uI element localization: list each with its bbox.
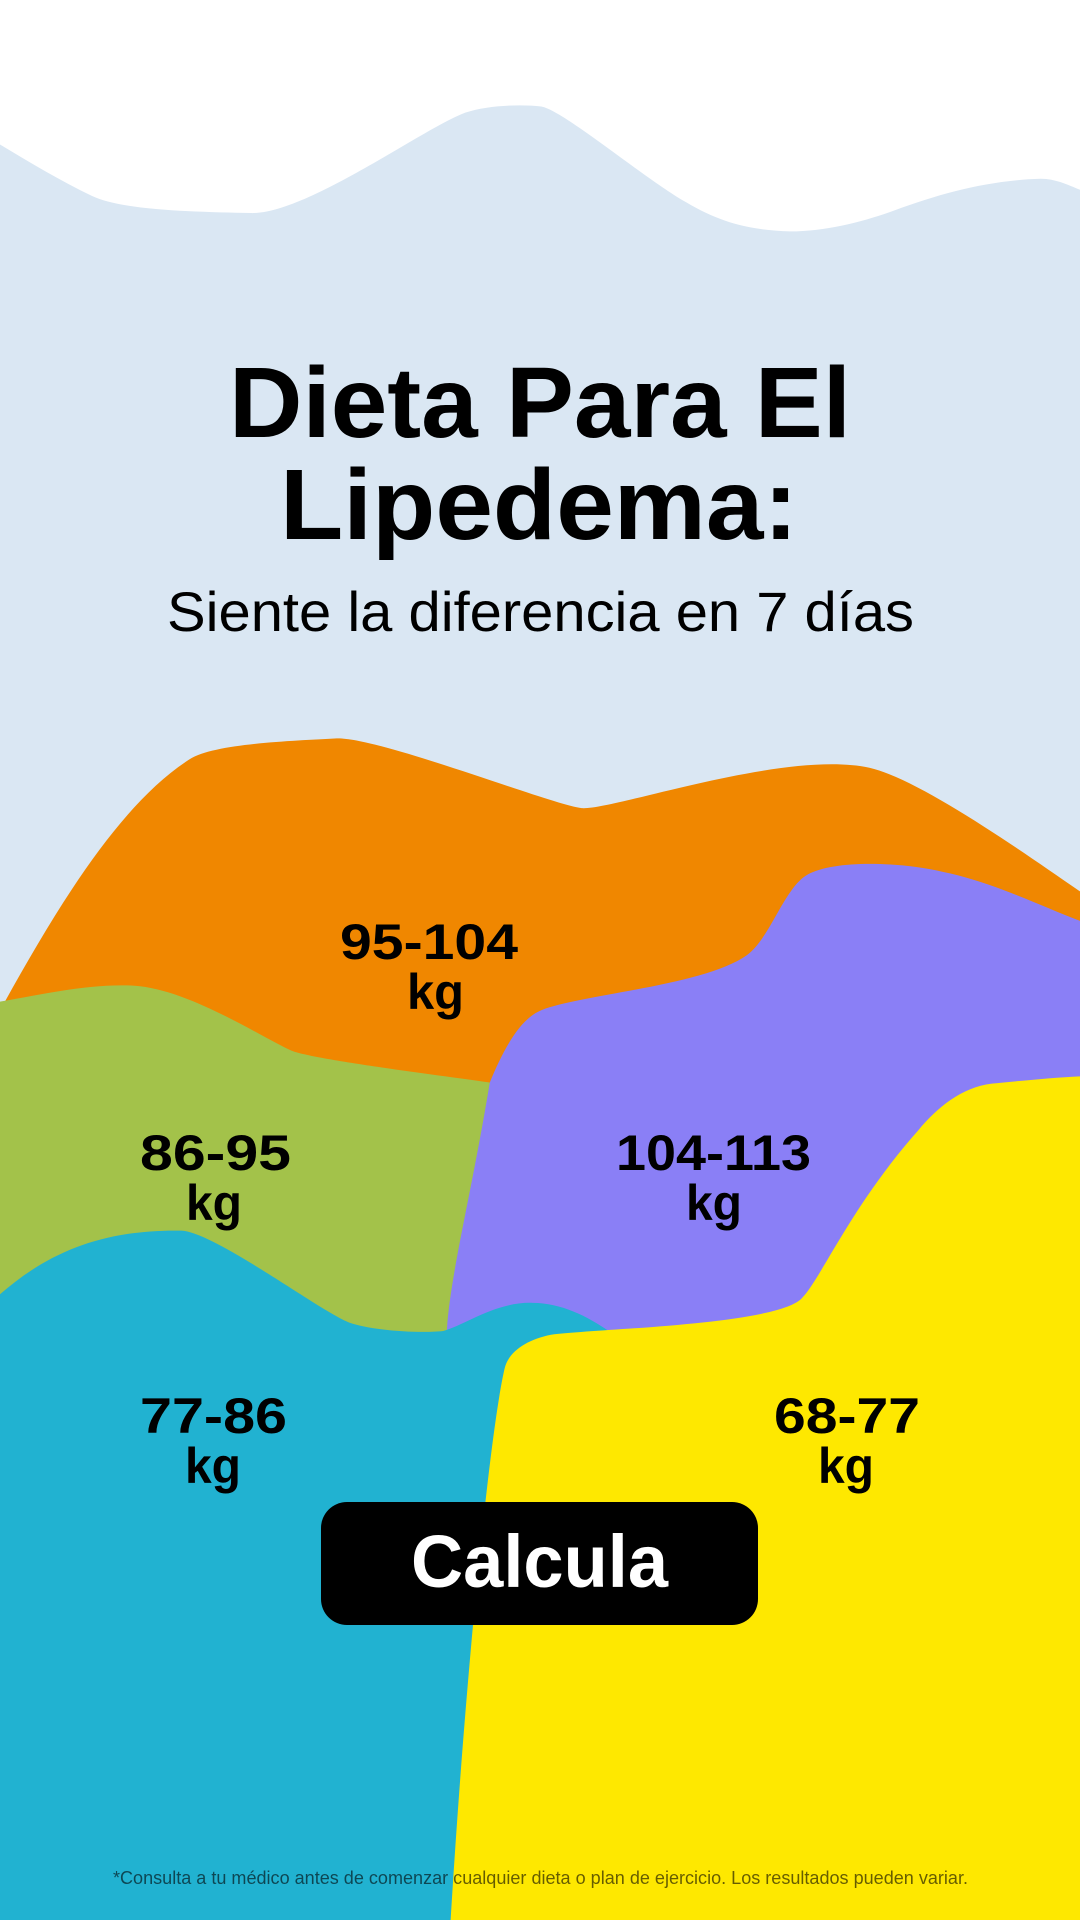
label: 104-113 kg [616, 1125, 811, 1231]
label: 86-95 kg: kg [186, 1175, 242, 1231]
subtitle: Siente la diferencia en 7 días [167, 580, 914, 643]
footnote disclaimer: *Consulta a tu médico antes de comenzar cualquier dieta o plan de ejercicio. Los resultados pueden variar. [113, 1868, 968, 1888]
label: 68-77 kg: kg [818, 1438, 874, 1494]
title: Lipedema: [280, 449, 798, 561]
label: 68-77 kg [774, 1388, 920, 1494]
label: 77-86 kg: 77-86 [140, 1388, 287, 1444]
region: yellow 68-77 kg [451, 1076, 1080, 1920]
button: Calcula [321, 1502, 758, 1625]
region: blue 77-86 kg [0, 1231, 637, 1920]
label: 86-95 kg [140, 1125, 291, 1231]
label: 77-86 kg: kg [185, 1438, 241, 1494]
label: 95-104 kg: 95-104 [340, 914, 518, 970]
title: Dieta Para El [229, 347, 851, 459]
region: green 86-95 kg [0, 985, 514, 1347]
label: 95-104 kg: kg [407, 964, 464, 1020]
label: 86-95 kg: 86-95 [140, 1125, 291, 1181]
label: 77-86 kg [140, 1388, 287, 1494]
label: 68-77 kg: 68-77 [774, 1388, 920, 1444]
button: Calcula: Calcula [411, 1520, 669, 1603]
region: purple 104-113 kg [447, 864, 1080, 1408]
label: 95-104 kg [340, 914, 518, 1020]
label: 104-113 kg: kg [686, 1175, 742, 1231]
label: 104-113 kg: 104-113 [616, 1125, 811, 1181]
region: orange 95-104 kg [5, 738, 1080, 1224]
title [229, 347, 851, 561]
